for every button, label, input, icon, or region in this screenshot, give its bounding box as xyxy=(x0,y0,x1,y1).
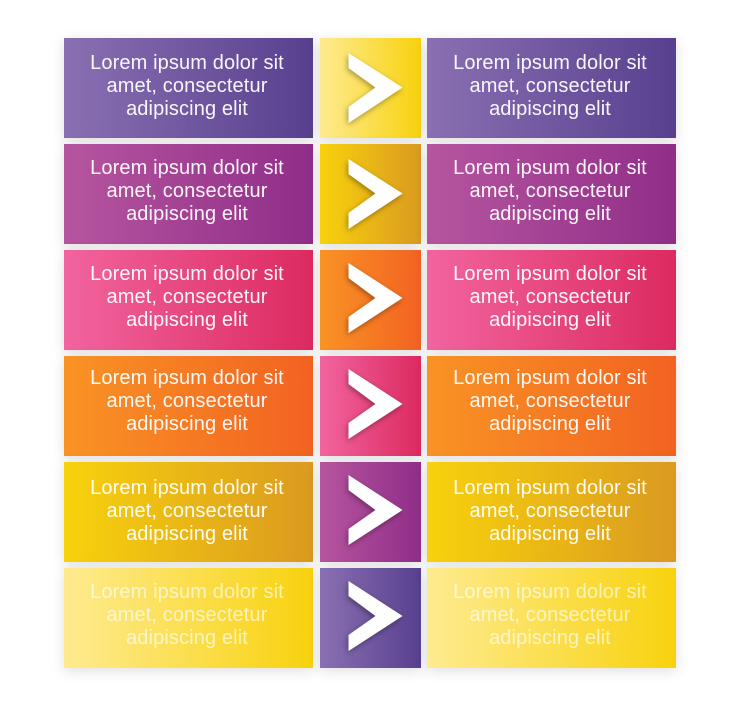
panel: row 3 left: adipiscing elit xyxy=(126,309,248,331)
panel: row 1 right: amet, consectetur xyxy=(469,75,630,97)
panel: row 2 left: adipiscing elit xyxy=(126,203,248,225)
panel: row 2 arrow tile xyxy=(320,144,420,244)
panel: row 3 right: amet, consectetur xyxy=(469,286,630,308)
panel: row 3 right xyxy=(427,250,676,350)
panel: row 4 left: amet, consectetur xyxy=(106,390,268,412)
panel: row 2 right: amet, consectetur xyxy=(469,180,630,202)
panel: row 5 left xyxy=(64,462,313,562)
panel: row 6 right: Lorem ipsum dolor sit xyxy=(453,581,647,603)
panel: row 3 right: adipiscing elit xyxy=(489,309,611,331)
panel: row 6 right: adipiscing elit xyxy=(489,627,611,649)
panel: row 1 right xyxy=(427,38,676,138)
panel: row 1 left: adipiscing elit xyxy=(126,98,248,120)
panel: row 1 left: amet, consectetur xyxy=(106,75,268,97)
panel: row 1 arrow tile xyxy=(320,38,420,138)
panel: row 5 left: Lorem ipsum dolor sit xyxy=(90,477,284,499)
panel: row 2 left: amet, consectetur xyxy=(106,180,268,202)
panel: row 6 arrow tile xyxy=(320,568,420,668)
panel: row 6 right xyxy=(427,568,676,668)
panel: row 5 right: Lorem ipsum dolor sit xyxy=(453,477,647,499)
panel: row 1 right: adipiscing elit xyxy=(489,98,611,120)
panel: row 5 left: amet, consectetur xyxy=(106,500,268,522)
panel: row 2 right xyxy=(427,144,676,244)
panel: row 3 arrow tile xyxy=(320,250,420,350)
panel: row 3 left: Lorem ipsum dolor sit xyxy=(90,263,284,285)
panel: row 6 left xyxy=(64,568,313,668)
panel: row 3 left: amet, consectetur xyxy=(106,286,268,308)
panel: row 6 left: amet, consectetur xyxy=(106,604,268,626)
panel: row 3 right: Lorem ipsum dolor sit xyxy=(453,263,647,285)
panel: row 1 right: Lorem ipsum dolor sit xyxy=(453,52,647,74)
panel: row 1 left xyxy=(64,38,313,138)
panel: row 4 right xyxy=(427,356,676,456)
panel: row 3 left xyxy=(64,250,313,350)
panel: row 6 left: Lorem ipsum dolor sit xyxy=(90,581,284,603)
panel: row 4 right: amet, consectetur xyxy=(469,390,630,412)
panel: row 5 left: adipiscing elit xyxy=(126,523,248,545)
panel: row 2 right: adipiscing elit xyxy=(489,203,611,225)
panel: row 4 left xyxy=(64,356,313,456)
panel: row 4 right: adipiscing elit xyxy=(489,413,611,435)
panel: row 6 right: amet, consectetur xyxy=(469,604,630,626)
panel: row 2 right: Lorem ipsum dolor sit xyxy=(453,157,647,179)
panel: row 4 arrow tile xyxy=(320,356,420,456)
panel: row 5 right: adipiscing elit xyxy=(489,523,611,545)
panel: row 4 left: adipiscing elit xyxy=(126,413,248,435)
panel: row 4 left: Lorem ipsum dolor sit xyxy=(90,367,284,389)
panel: row 5 arrow tile xyxy=(320,462,420,562)
panel: row 1 left: Lorem ipsum dolor sit xyxy=(90,52,284,74)
panel: row 5 right xyxy=(427,462,676,562)
panel: row 4 right: Lorem ipsum dolor sit xyxy=(453,367,647,389)
panel: row 6 left: adipiscing elit xyxy=(126,627,248,649)
panel: row 5 right: amet, consectetur xyxy=(469,500,630,522)
panel: row 2 left: Lorem ipsum dolor sit xyxy=(90,157,284,179)
panel: row 2 left xyxy=(64,144,313,244)
